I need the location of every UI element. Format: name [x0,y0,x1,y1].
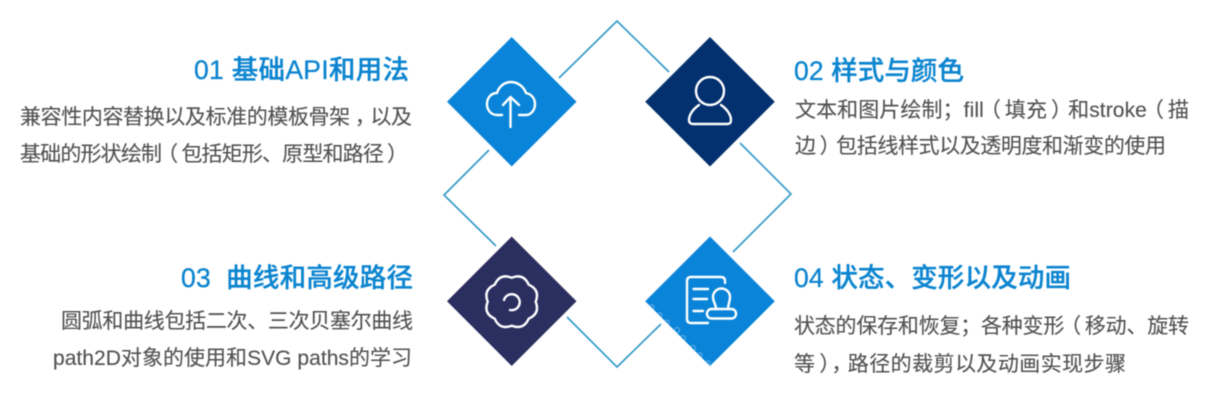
watermark dots [650,305,710,365]
text block 04 [794,310,1189,376]
heading 02: 02 样式与颜色 [794,56,964,86]
text block 02: 文本和图片绘制；fill（填充）和stroke（描 [795,94,1189,124]
icon: user [689,77,731,124]
icon: document and stamp [687,277,736,323]
icon: gear [486,276,537,327]
text block 01: 兼容性内容替换以及标准的模板骨架，以及 [20,106,412,129]
text block 03: path2D对象的使用和SVG paths的学习 [53,347,412,370]
text block 02 [795,94,1189,158]
panel: item 04 state and animation [645,236,1189,376]
panel: item 03 curves and paths [53,236,576,370]
connector lines frame [444,21,791,367]
icon: cloud upload [487,82,535,127]
panel: item 01 basic API [20,37,576,166]
heading 03: 03 曲线和高级路径 [181,263,413,293]
text block 01: 基础的形状绘制（包括矩形、原型和路径） [20,143,408,166]
text block 04: 等），路径的裁剪以及动画实现步骤 [794,353,1126,376]
diamond 03 [447,236,576,366]
text block 02: 边）包括线样式以及透明度和渐变的使用 [795,135,1166,158]
diamond 04 [645,236,775,366]
diamond 02 [645,37,775,166]
panel: item 02 styles and colors [645,37,1189,166]
text block 04: 状态的保存和恢复；各种变形（移动、旋转 [794,310,1189,340]
text block 01 [20,106,412,166]
text block 03: 圆弧和曲线包括二次、三次贝塞尔曲线 [61,310,413,333]
diamond 01 [447,37,576,166]
text block 03 [53,310,413,370]
heading 04: 04 状态、变形以及动画 [794,263,1071,293]
heading 01: 01 基础API和用法 [194,55,409,85]
